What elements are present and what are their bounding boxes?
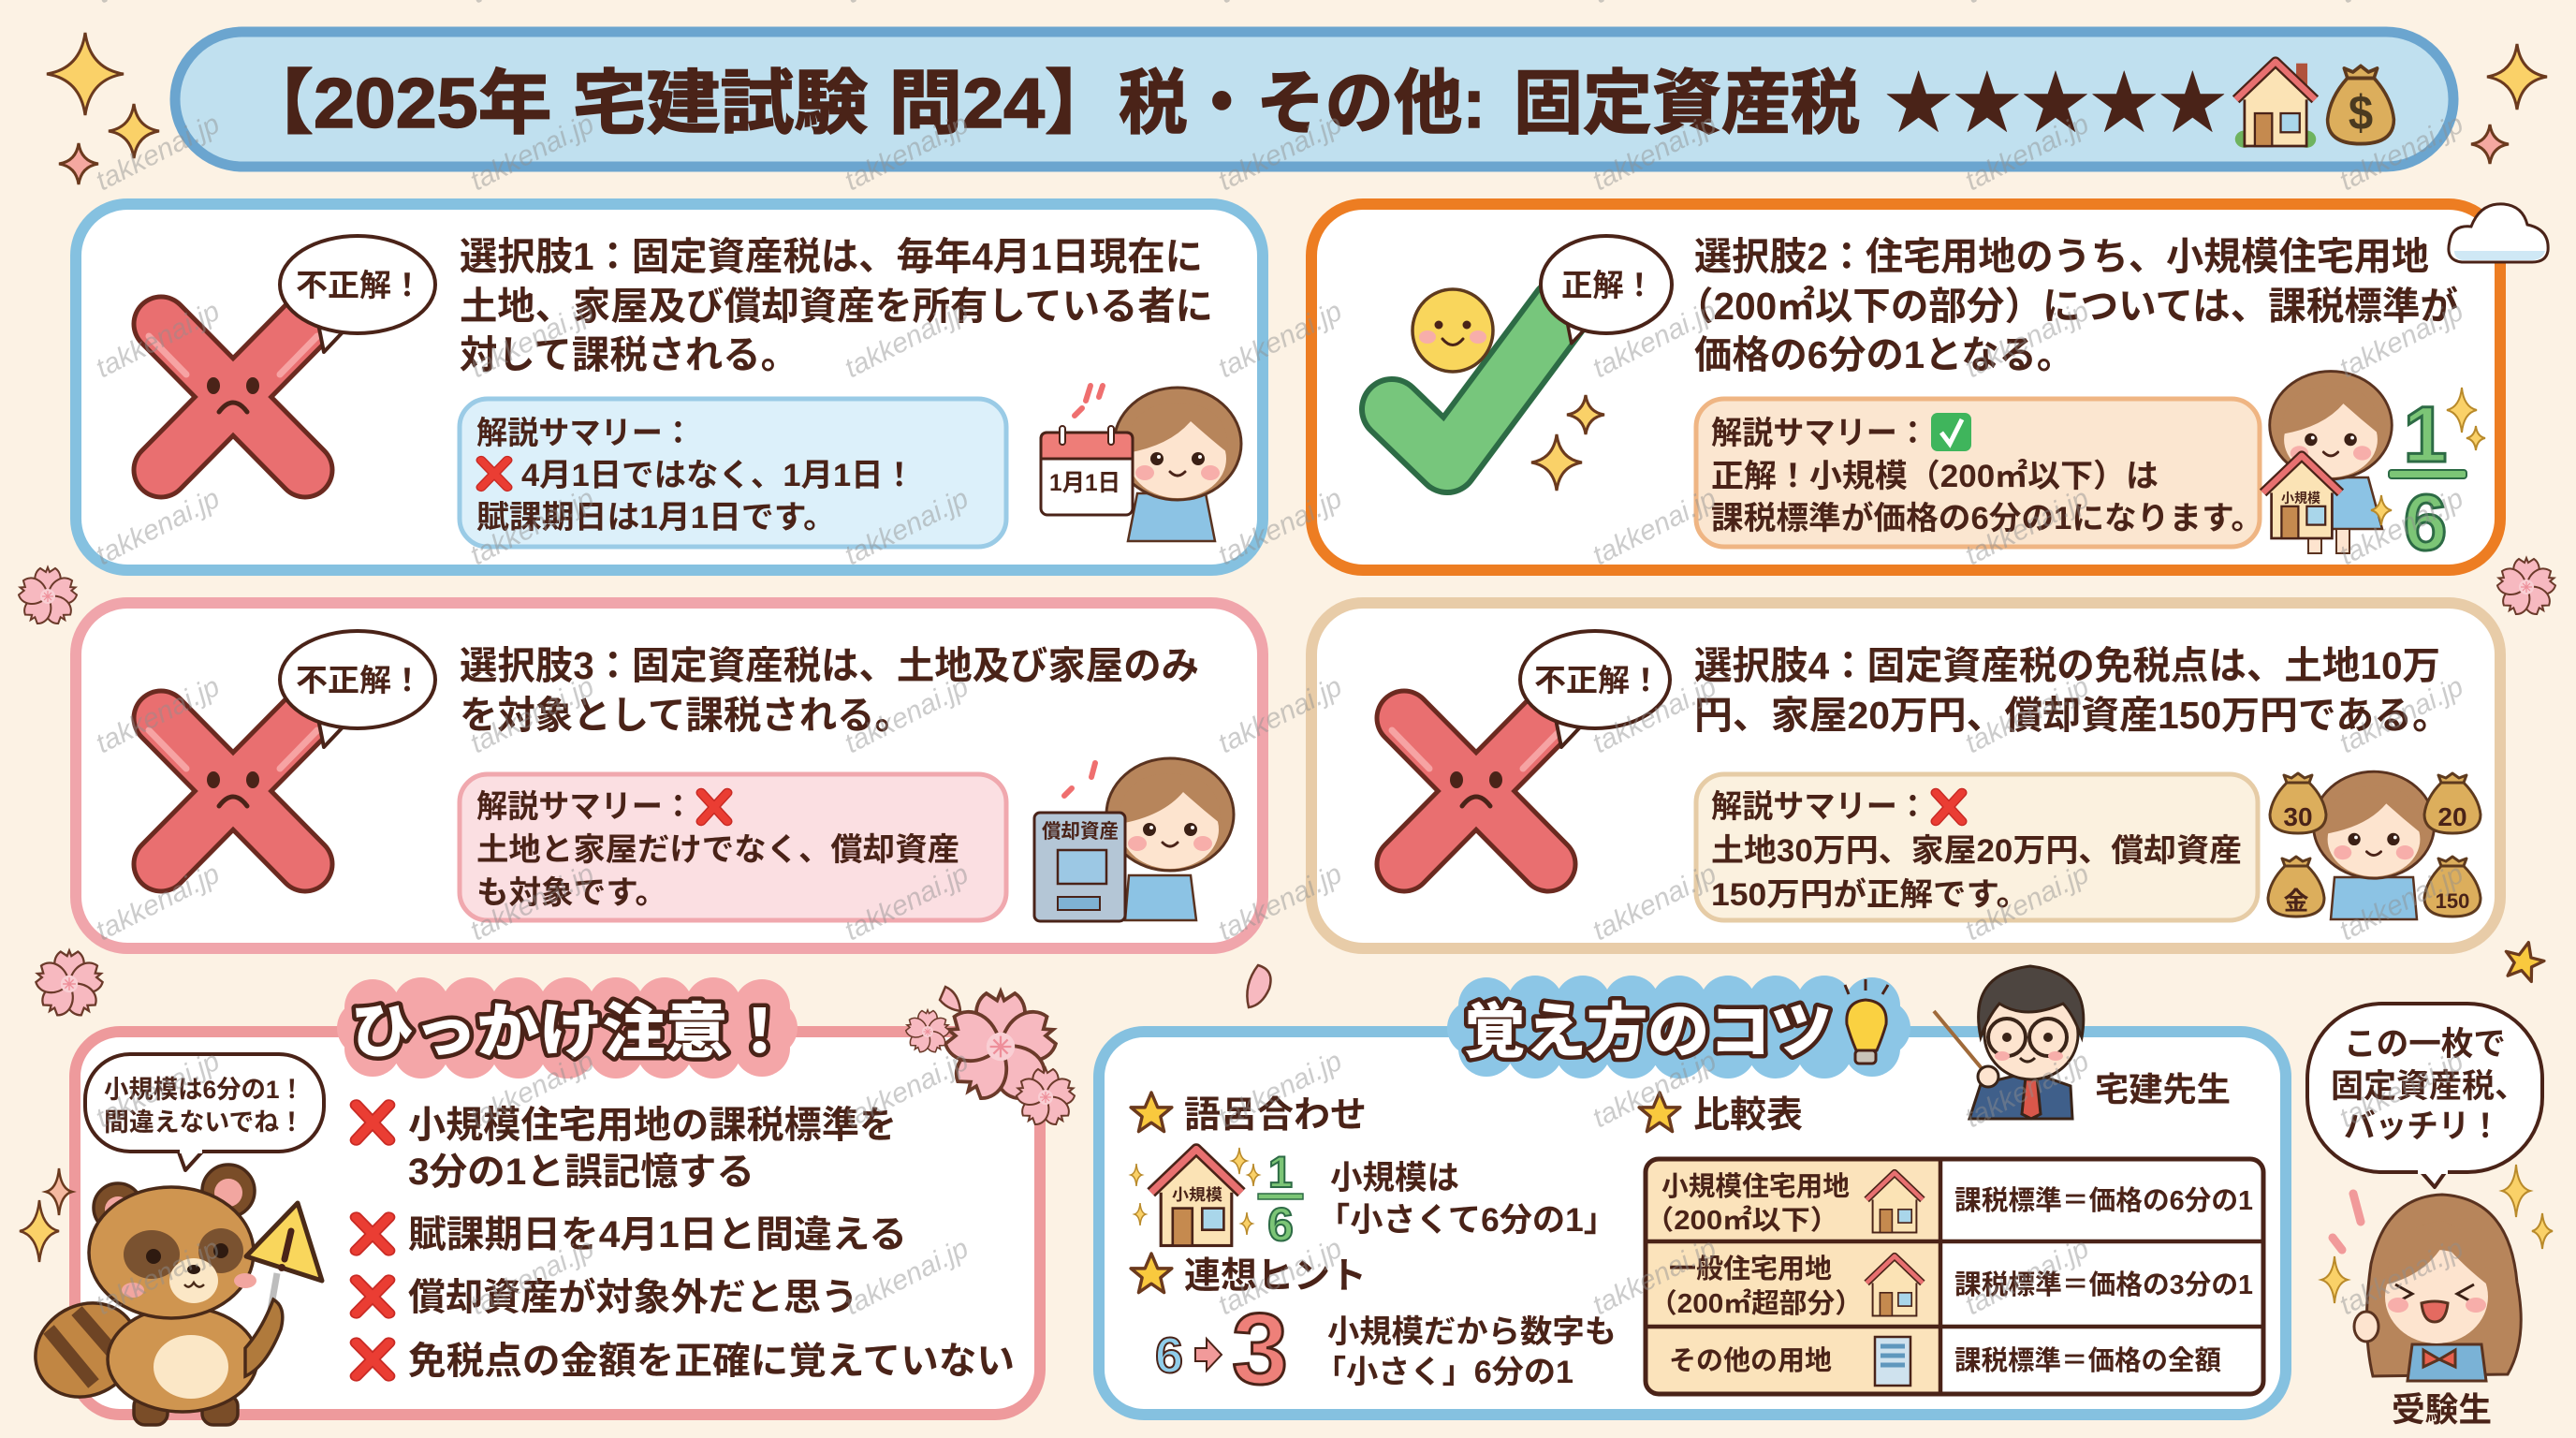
bubble: student: 固定資産税、 (2331, 1068, 2527, 1105)
watermark: takkenai.jp (465, 858, 599, 946)
watermark: takkenai.jp (91, 483, 225, 571)
watermark: takkenai.jp (2334, 483, 2468, 571)
watermark: takkenai.jp (91, 671, 225, 759)
icon: money bag: $ (2349, 85, 2373, 140)
title text: 固定資産税 (1514, 64, 1860, 142)
watermark: takkenai.jp (1960, 483, 2094, 571)
illustration: girl with machine (1034, 758, 1234, 921)
section: 語呂合わせ: 小規模は (1330, 1160, 1459, 1196)
bubble: 正解 (1541, 236, 1672, 344)
item 3: 償却資産が対象外だと思う (408, 1277, 858, 1318)
summary box 2 (1696, 399, 2263, 547)
summary box 2: 解説サマリー： (1711, 416, 1928, 451)
watermark: takkenai.jp (91, 858, 225, 946)
item 1 (356, 1105, 897, 1193)
watermark: takkenai.jp (1213, 858, 1347, 946)
section: 比較表 (1639, 1093, 1803, 1136)
watermark: takkenai.jp (1213, 483, 1347, 571)
bubble: tanuki: 間違えないでね！ (104, 1108, 304, 1137)
watermark: takkenai.jp (1213, 1233, 1347, 1321)
title text (240, 64, 2227, 142)
summary box 1: 解説サマリー： (476, 416, 694, 451)
watermark: takkenai.jp (1960, 671, 2094, 759)
summary box 3: も対象です。 (476, 875, 667, 911)
watermark: takkenai.jp (1960, 296, 2094, 384)
item 1: 3分の1と誤記憶する (408, 1152, 754, 1193)
question text 2 (1676, 235, 2458, 376)
label: teacher: 宅建先生 (2095, 1070, 2231, 1108)
label: student: 受験生 (2392, 1390, 2492, 1429)
bubble: 不正解 (280, 236, 435, 352)
question text 2: 選択肢2：住宅用地のうち、小規模住宅用地 (1694, 235, 2429, 278)
icon: building (1875, 1337, 1910, 1386)
icon: light bulb (1845, 979, 1888, 1064)
section: 連想ヒント: 小規模だから数字も (1327, 1314, 1617, 1350)
sparkles near check (1531, 395, 1604, 491)
panel: trap warning (19, 977, 1077, 1425)
question text 1: 選択肢1：固定資産税は、毎年4月1日現在に (460, 235, 1203, 278)
watermark: takkenai.jp (91, 1233, 225, 1321)
panel: choice 2 (1311, 204, 2548, 570)
watermark: takkenai.jp (1588, 1046, 1721, 1134)
illustration: girl with money bags: 30 (2283, 802, 2313, 831)
illustration: girl with calendar: 1月1日 (1049, 470, 1120, 496)
watermark: takkenai.jp (465, 1046, 599, 1134)
panel: choice 1 (76, 204, 1263, 570)
watermark: takkenai.jp (1960, 1233, 2094, 1321)
item 2: 賦課期日を4月1日と間違える (408, 1214, 907, 1255)
watermark: takkenai.jp (1213, 296, 1347, 384)
bubble: 不正解: 不正解！ (296, 268, 423, 302)
icon: sad X (149, 324, 317, 470)
watermark: takkenai.jp (2334, 296, 2468, 384)
row 3: その他の用地 (1669, 1345, 1832, 1376)
watermark: takkenai.jp (1213, 1046, 1347, 1134)
watermark: takkenai.jp (465, 296, 599, 384)
icon: sad X (149, 718, 317, 864)
row 2: （200㎡超部分） (1649, 1288, 1863, 1319)
bubble: tanuki: 小規模は6分の1！ (104, 1076, 304, 1104)
summary box 3: 土地と家屋だけでなく、償却資産 (476, 832, 959, 868)
sparkles: tanuki (20, 1168, 72, 1262)
summary box 2: 課税標準が価格の6分の1になります。 (1711, 500, 2263, 536)
icon: house (2235, 62, 2316, 148)
watermark: takkenai.jp (1588, 296, 1721, 384)
panel: memory tips (1099, 966, 2286, 1415)
sparkles near fraction (2371, 388, 2485, 525)
watermark: takkenai.jp (840, 109, 973, 197)
illustration: girl with machine: 償却資産 (1042, 821, 1119, 843)
watermark: takkenai.jp (465, 109, 599, 197)
section: 連想ヒント (1131, 1254, 1617, 1405)
title text: 【2025年 宅建試験 問24】 (240, 64, 1119, 142)
icon: house with fraction: 6 (1267, 1198, 1294, 1251)
icon: money bag (2328, 66, 2393, 144)
icon: house with fraction: 1 (1268, 1147, 1293, 1196)
bubble: student (2307, 1004, 2542, 1187)
bubble: 不正解 (280, 631, 435, 747)
watermark: takkenai.jp (840, 1233, 973, 1321)
cherry blossoms: heading right (904, 987, 1077, 1128)
bubble: 正解: 正解！ (1561, 268, 1655, 302)
watermark: takkenai.jp (91, 109, 225, 197)
section: 語呂合わせ: 語呂合わせ (1184, 1095, 1367, 1136)
watermark: takkenai.jp (840, 1046, 973, 1134)
icon: green check (1392, 309, 1561, 462)
icon: sad X (1392, 718, 1560, 864)
illustration: girl with house (2263, 372, 2392, 553)
watermark: takkenai.jp (1588, 1233, 1721, 1321)
watermark: takkenai.jp (91, 296, 225, 384)
title banner (175, 32, 2453, 167)
row 1: 課税標準＝価格の6分の1 (1954, 1185, 2253, 1216)
illustration: teacher (1934, 966, 2084, 1119)
summary box 4: 150万円が正解です。 (1711, 876, 2029, 913)
illustration: girl with house: 小規模 (2281, 491, 2320, 506)
question text 1: 対して課税される。 (460, 333, 798, 376)
bubble: 不正解: 不正解！ (1534, 663, 1661, 697)
question text 1: 土地、家屋及び償却資産を所有している者に (460, 285, 1213, 328)
summary box 3: 解説サマリー： (476, 789, 694, 825)
sparkles: top left (47, 33, 159, 184)
sparkles: student (2321, 1165, 2553, 1303)
question text 4: 選択肢4：固定資産税の免税点は、土地10万 (1694, 644, 2440, 687)
watermark: takkenai.jp (1213, 109, 1347, 197)
watermark: takkenai.jp (2334, 109, 2468, 197)
bubble: student: この一枚で (2344, 1026, 2506, 1063)
row 1: （200㎡以下） (1645, 1205, 1839, 1236)
panel: choice 4 (1311, 603, 2500, 948)
row 1: 小規模住宅用地 (1661, 1171, 1850, 1202)
section: 連想ヒント: 連想ヒント (1184, 1256, 1367, 1297)
question text 2: 価格の6分の1となる。 (1694, 333, 2074, 376)
summary box 4: 解説サマリー： (1711, 789, 1928, 825)
summary box 3 (460, 774, 1006, 920)
summary box 1: 4月1日ではなく、1月1日！ (521, 458, 915, 493)
question text 3 (460, 644, 1199, 737)
row 3: 課税標準＝価格の全額 (1954, 1345, 2221, 1376)
fraction 1/6: 6 (2404, 478, 2447, 566)
watermark: takkenai.jp (2334, 671, 2468, 759)
bubble: student: バッチリ！ (2344, 1108, 2501, 1145)
6 to 3 graphic (1155, 1292, 1288, 1405)
icon: smiley (1412, 289, 1493, 372)
heading: ひっかけ注意: ひっかけ注意！ (351, 998, 791, 1065)
illustration: girl with money bags: 20 (2437, 802, 2467, 831)
question text 4: 円、家屋20万円、償却資産150万円である。 (1694, 694, 2451, 737)
question text 4 (1694, 644, 2451, 737)
cherry blossoms: margins (16, 558, 2558, 1020)
watermark: takkenai.jp (1960, 858, 2094, 946)
watermark: takkenai.jp (465, 1233, 599, 1321)
title text: 税・その他: (1119, 64, 1486, 142)
summary box 4 (1696, 774, 2258, 920)
title text: ★★★★★ (1884, 65, 2227, 142)
watermark: takkenai.jp (465, 671, 599, 759)
watermark: takkenai.jp (1960, 1046, 2094, 1134)
heading: ひっかけ注意 (337, 977, 798, 1078)
illustration: tanuki with warning sign (19, 1165, 322, 1425)
watermark: takkenai.jp (840, 671, 973, 759)
section: 比較表: 比較表 (1693, 1095, 1803, 1136)
question text 1 (460, 235, 1213, 376)
row 3 (1669, 1337, 2221, 1386)
section: 語呂合わせ: 「小さくて6分の1」 (1317, 1202, 1617, 1239)
fraction 1/6: 1 (2404, 390, 2447, 478)
summary box 1: 賦課期日は1月1日です。 (476, 500, 836, 536)
illustration: girl with money bags: 金 (2284, 888, 2308, 916)
6 to 3 graphic: 6 (1155, 1328, 1183, 1384)
icon: house with fraction: 小規模 (1172, 1186, 1222, 1204)
watermark: takkenai.jp (1213, 671, 1347, 759)
watermark: takkenai.jp (91, 1046, 225, 1134)
summary box 4: 土地30万円、家屋20万円、償却資産 (1711, 833, 2242, 869)
summary box 1 (460, 399, 1006, 547)
bubble: 不正解 (1520, 631, 1670, 747)
watermark: takkenai.jp (1588, 671, 1721, 759)
question text 2: （200㎡以下の部分）については、課税標準が (1676, 285, 2458, 328)
icon: house with fraction (1131, 1147, 1303, 1251)
bubble: tanuki (85, 1054, 324, 1170)
heading: 覚え方のコツ: 覚え方のコツ (1464, 998, 1832, 1065)
watermark: takkenai.jp (840, 296, 973, 384)
illustration: girl with money bags (2268, 771, 2481, 919)
watermark: takkenai.jp (1588, 858, 1721, 946)
watermark: takkenai.jp (1960, 109, 2094, 197)
warning list (356, 1105, 1015, 1382)
6 to 3 graphic: 3 (1232, 1292, 1288, 1405)
section: 連想ヒント: 「小さく」6分の1 (1314, 1355, 1573, 1390)
watermark: takkenai.jp (2334, 858, 2468, 946)
comparison table (1645, 1159, 2263, 1394)
illustration: girl with calendar (1041, 386, 1241, 541)
summary box 2: 正解！小規模（200㎡以下）は (1711, 459, 2159, 494)
question text 3: 選択肢3：固定資産税は、土地及び家屋のみ (460, 644, 1199, 687)
sparkles: top right (2471, 44, 2547, 164)
item 4: 免税点の金額を正確に覚えていない (408, 1341, 1015, 1382)
row 2: 課税標準＝価格の3分の1 (1954, 1269, 2253, 1300)
watermark: takkenai.jp (1588, 109, 1721, 197)
heading: 覚え方のコツ (1447, 976, 1910, 1078)
row 2: 一般住宅用地 (1669, 1254, 1832, 1284)
item 1: 小規模住宅用地の課税標準を (408, 1105, 897, 1146)
icon: cloud (2449, 204, 2548, 262)
icon: gold star right margin (2500, 938, 2548, 983)
question text 3: を対象として課税される。 (460, 694, 913, 737)
icon: check box (1931, 413, 1971, 451)
fraction 1/6 (2389, 390, 2466, 566)
watermark: takkenai.jp (2334, 1233, 2468, 1321)
watermark: takkenai.jp (1588, 483, 1721, 571)
watermark: takkenai.jp (2334, 1046, 2468, 1134)
illustration: girl with money bags: 150 (2436, 889, 2469, 913)
section: 語呂合わせ (1131, 1093, 1617, 1251)
bubble: 不正解: 不正解！ (296, 663, 423, 697)
panel: choice 3 (76, 603, 1263, 948)
watermark: takkenai.jp (840, 858, 973, 946)
watermark: takkenai.jp (840, 483, 973, 571)
watermark: takkenai.jp (465, 483, 599, 571)
row 2 (1649, 1254, 2253, 1319)
row 1 (1645, 1171, 2253, 1236)
illustration: student (2354, 1195, 2521, 1381)
